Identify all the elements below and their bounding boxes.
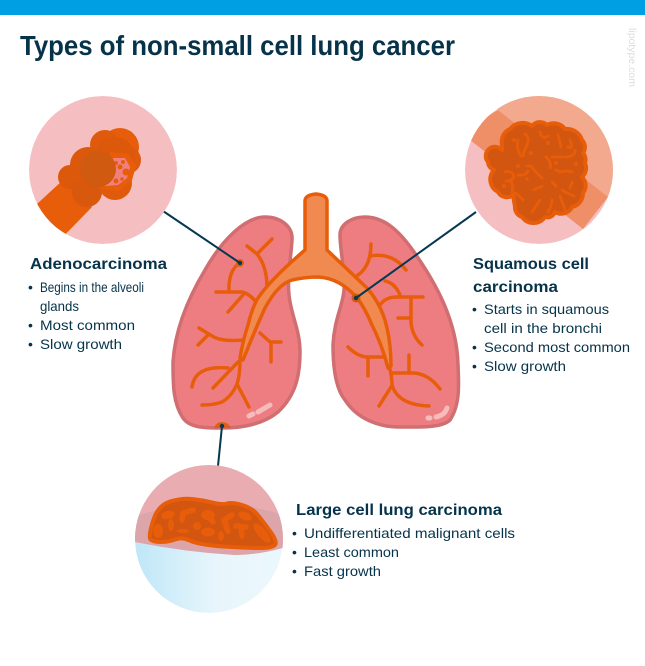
text: large cell lung carcinoma xyxy=(292,502,515,579)
left lung xyxy=(173,217,300,428)
text: squamous cell carcinoma: Squamous cell xyxy=(473,256,589,273)
text: squamous cell carcinoma: cell in the bronchi xyxy=(484,320,602,336)
circle: large cell xyxy=(135,465,283,613)
text: squamous cell carcinoma: • xyxy=(472,358,477,374)
squamous tumour xyxy=(486,122,586,223)
leader line: adenocarcinoma xyxy=(163,211,242,265)
lungs illustration xyxy=(173,194,459,428)
text: adenocarcinoma: • xyxy=(28,279,33,295)
large cell tumour xyxy=(150,499,276,548)
leader line: large cell xyxy=(218,424,224,466)
left lung highlight xyxy=(249,405,270,416)
circle: adenocarcinoma xyxy=(25,96,177,245)
text: squamous cell carcinoma: Second most common xyxy=(484,339,630,355)
text: squamous cell carcinoma xyxy=(472,256,630,374)
text: large cell lung carcinoma: Fast growth xyxy=(304,563,381,579)
text: adenocarcinoma: • xyxy=(28,336,33,352)
alveoli window xyxy=(105,152,134,186)
text: large cell lung carcinoma: • xyxy=(292,525,297,541)
text: squamous cell carcinoma: Slow growth xyxy=(484,358,566,374)
text: large cell lung carcinoma: • xyxy=(292,544,297,560)
trachea and main bronchi xyxy=(240,194,391,368)
text: adenocarcinoma: Begins in the alveoli xyxy=(40,279,144,295)
text: large cell lung carcinoma: Least common xyxy=(304,544,399,560)
text: squamous cell carcinoma: Starts in squamous xyxy=(484,301,609,317)
circle: squamous cell xyxy=(465,96,613,244)
text: large cell lung carcinoma: Large cell lung carcinoma xyxy=(296,502,502,519)
left bronchial branches xyxy=(192,239,281,407)
text: adenocarcinoma: Slow growth xyxy=(40,336,122,352)
text: large cell lung carcinoma: Undifferentiated malignant cells xyxy=(304,525,515,541)
tumour marker on left lung base xyxy=(214,422,231,428)
text: squamous cell carcinoma: • xyxy=(472,339,477,355)
right lung highlight xyxy=(428,408,447,418)
text: adenocarcinoma: Adenocarcinoma xyxy=(30,256,167,273)
text: squamous cell carcinoma: carcinoma xyxy=(473,279,558,296)
tumour marker on right bronchus xyxy=(352,294,360,302)
tumour marker on left branch xyxy=(236,259,244,267)
top bar xyxy=(0,0,645,15)
text: adenocarcinoma: Most common xyxy=(40,317,135,333)
text: squamous cell carcinoma: • xyxy=(472,301,477,317)
text: large cell lung carcinoma: • xyxy=(292,563,297,579)
text: adenocarcinoma: glands xyxy=(40,298,79,314)
text: adenocarcinoma xyxy=(28,256,167,352)
watermark: lipotype.com xyxy=(626,28,638,87)
text: adenocarcinoma: • xyxy=(28,317,33,333)
leader line: squamous xyxy=(354,212,476,300)
right lung xyxy=(333,217,459,427)
right bronchial branches xyxy=(348,244,440,406)
title: Types of non-small cell lung cancer xyxy=(20,30,455,61)
